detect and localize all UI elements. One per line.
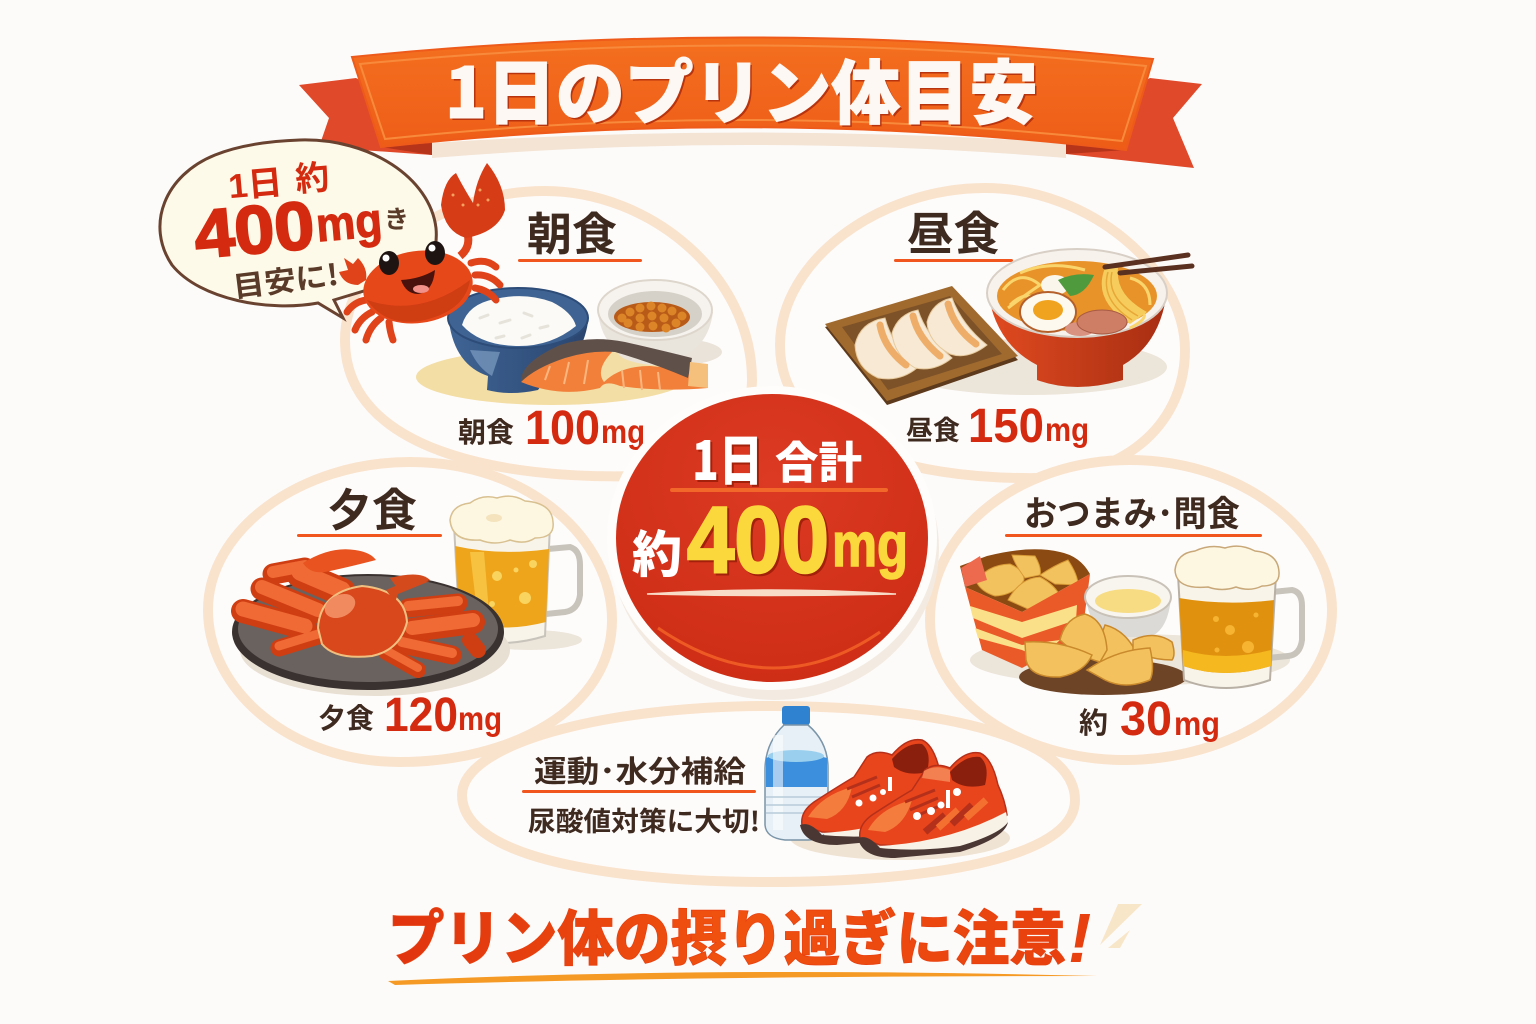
total value: 約 xyxy=(632,515,682,587)
speech bubble xyxy=(160,140,436,318)
dinner amount xyxy=(318,689,502,742)
icon: grilled salmon xyxy=(521,339,708,392)
breakfast amount: 100 xyxy=(525,402,600,455)
lunch heading: 昼食 xyxy=(907,198,1000,264)
snack heading: おつまみ･問食 xyxy=(1024,486,1240,537)
total value: mg xyxy=(832,511,908,580)
total value xyxy=(632,487,908,594)
icon: beer mug xyxy=(450,496,582,650)
bubble text: mg xyxy=(314,194,384,253)
dinner heading xyxy=(297,474,442,539)
icon: beer mug xyxy=(1175,546,1302,688)
icon: breakfast food xyxy=(416,280,722,405)
total label xyxy=(692,417,862,498)
bubble text: き xyxy=(384,200,409,236)
exercise text: 尿酸値対策に大切! xyxy=(528,800,760,839)
front shoe xyxy=(858,753,1008,858)
icon: water bottle xyxy=(765,706,1010,860)
title text: 1日のプリン体目安 xyxy=(447,40,1040,141)
footer warning: ! xyxy=(1068,899,1091,977)
lunch amount: 150 xyxy=(968,400,1044,453)
icon: snow crab on plate xyxy=(232,549,510,696)
breakfast amount: 朝食 xyxy=(458,411,514,451)
icon: ramen bowl xyxy=(987,249,1192,387)
bubble text: 1日 xyxy=(227,164,284,206)
icon: rice bowl xyxy=(448,288,588,393)
bubble text xyxy=(191,150,409,306)
bubble text: 400 xyxy=(191,187,317,273)
title text: 1日のプリン体目安 xyxy=(445,38,1038,139)
total value: 400 xyxy=(689,489,831,594)
panel: breakfast ring xyxy=(345,191,752,476)
icon: sauce bowl xyxy=(1085,576,1171,637)
total label: 1日 xyxy=(694,419,765,498)
exercise text xyxy=(522,747,760,839)
panel: lunch ring xyxy=(780,188,1185,478)
total label: 1日 xyxy=(692,417,763,496)
title ribbon xyxy=(299,37,1202,168)
lunch amount: mg xyxy=(1045,411,1089,448)
panel: dinner ring xyxy=(208,462,612,762)
footer warning: プリン体の摂り過ぎに注意 xyxy=(388,891,1066,978)
total value: 400 xyxy=(687,487,829,592)
icon: snack food xyxy=(960,546,1302,695)
total label: 合計 xyxy=(775,427,862,491)
breakfast amount: mg xyxy=(601,413,645,450)
icon: lunch food xyxy=(825,249,1192,405)
icon: natto bowl xyxy=(598,280,713,358)
snack amount: 約 xyxy=(1079,700,1108,742)
dinner amount: mg xyxy=(458,700,502,737)
dinner amount: 夕食 xyxy=(318,697,374,737)
breakfast amount xyxy=(458,402,645,455)
icon: crab mascot xyxy=(339,163,505,340)
bubble text: 約 xyxy=(293,150,331,201)
exercise text: 運動･水分補給 xyxy=(534,747,746,791)
panel: snack ring xyxy=(930,460,1332,760)
icon: running shoes xyxy=(800,740,1008,858)
dinner heading: 夕食 xyxy=(327,474,417,539)
bubble text: 目安に! xyxy=(230,252,341,306)
lunch amount xyxy=(906,400,1089,453)
icon: gyoza plate xyxy=(825,286,1018,405)
snack amount: mg xyxy=(1174,705,1220,742)
total circle xyxy=(607,386,939,700)
icon: potato chips xyxy=(1025,614,1174,685)
back shoe xyxy=(800,740,950,845)
snack amount xyxy=(1079,693,1220,746)
breakfast heading: 朝食 xyxy=(527,198,617,263)
icon: chips box xyxy=(960,549,1090,668)
dinner amount: 120 xyxy=(384,689,458,742)
lunch amount: 昼食 xyxy=(906,409,960,448)
panel: exercise ring xyxy=(462,706,1075,882)
snack amount: 30 xyxy=(1120,693,1172,746)
